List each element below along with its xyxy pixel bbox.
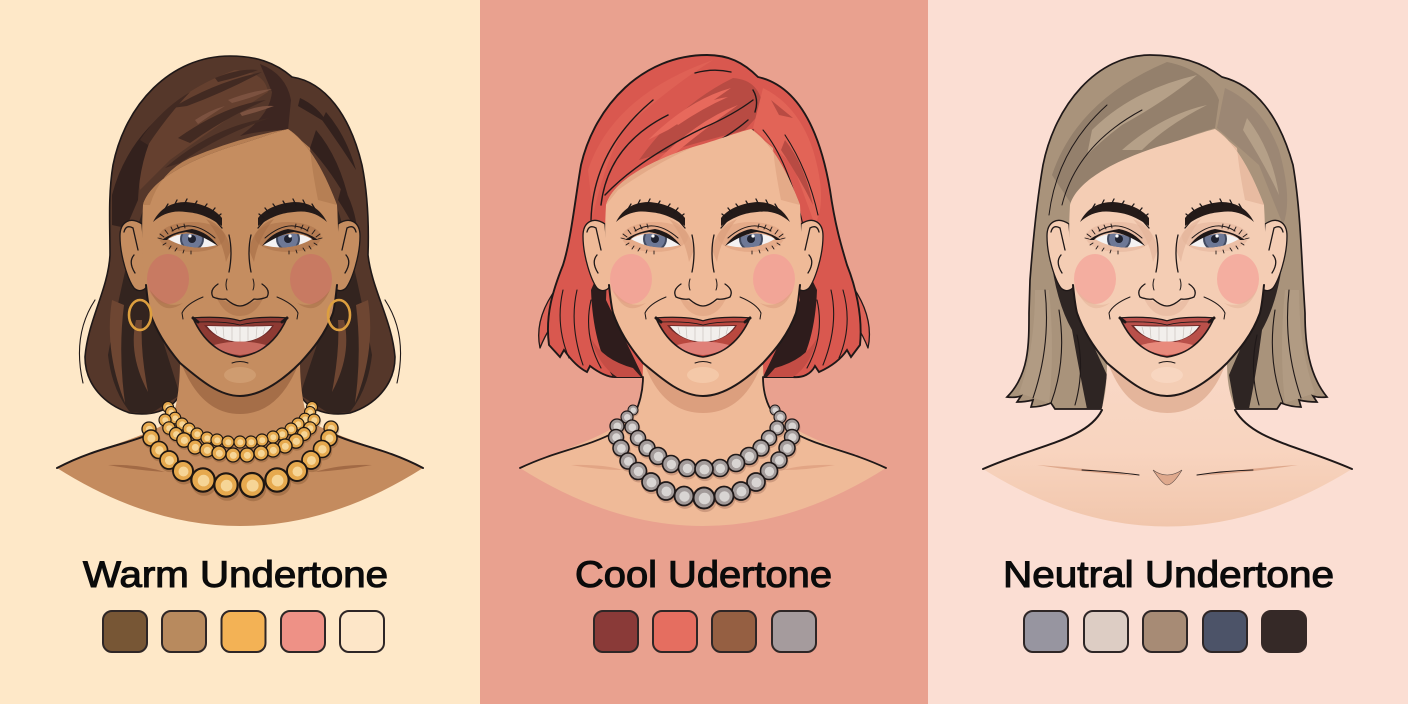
- face: [142, 129, 338, 396]
- facial features: [147, 199, 332, 383]
- jawline: [146, 285, 337, 396]
- ears: [1047, 220, 1287, 291]
- panel background: cool: [480, 0, 928, 704]
- ears: [120, 220, 360, 291]
- hair: red: [539, 55, 869, 377]
- pearl necklace: [608, 405, 801, 512]
- facial features: [610, 199, 795, 383]
- shoulder outline: [57, 434, 423, 468]
- panel background: neutral: [928, 0, 1408, 704]
- facial features: [1074, 199, 1259, 383]
- face: [1069, 129, 1265, 396]
- neck shadow: [1107, 360, 1227, 413]
- gold necklace: [142, 402, 339, 501]
- heading: cool undertone: Cool Udertone: [575, 554, 832, 595]
- ears: [583, 220, 823, 291]
- neck shadow: [643, 360, 763, 413]
- forehead shading: [606, 129, 800, 205]
- neck and shoulders: [520, 360, 886, 526]
- jawline: [609, 285, 800, 396]
- swatches: cool palette: [594, 611, 816, 652]
- neck and shoulder outline: [520, 377, 886, 468]
- panel: neutral undertone: [928, 0, 1408, 704]
- neck shadow: [180, 360, 300, 414]
- heading: neutral undertone: Neutral Undertone: [1003, 554, 1334, 595]
- heading: warm undertone: Warm Undertone: [83, 554, 388, 595]
- forehead shading: [1215, 129, 1264, 205]
- portrait: cool: [520, 55, 886, 526]
- panel: cool undertone: [480, 0, 928, 704]
- collarbone shading: [571, 465, 835, 470]
- panel: warm undertone: [0, 0, 480, 704]
- hair: dark brown: [79, 56, 401, 414]
- collarbone shading: [108, 465, 372, 472]
- collarbones and notch: [1037, 465, 1298, 485]
- neck and shoulders: [57, 360, 423, 526]
- portrait: warm: [57, 56, 423, 526]
- swatches: warm palette: [103, 611, 384, 652]
- gold hoop earrings: [129, 300, 350, 330]
- neck and shoulders: [983, 360, 1352, 526]
- jawline: [1073, 285, 1264, 396]
- neck and shoulder outline: [983, 410, 1352, 469]
- forehead shading: [143, 129, 337, 205]
- panel background: warm: [0, 0, 480, 704]
- hair: ash brown: [1007, 55, 1327, 409]
- swatches: neutral palette: [1024, 611, 1306, 652]
- face: [605, 129, 801, 396]
- portrait: neutral: [983, 55, 1352, 526]
